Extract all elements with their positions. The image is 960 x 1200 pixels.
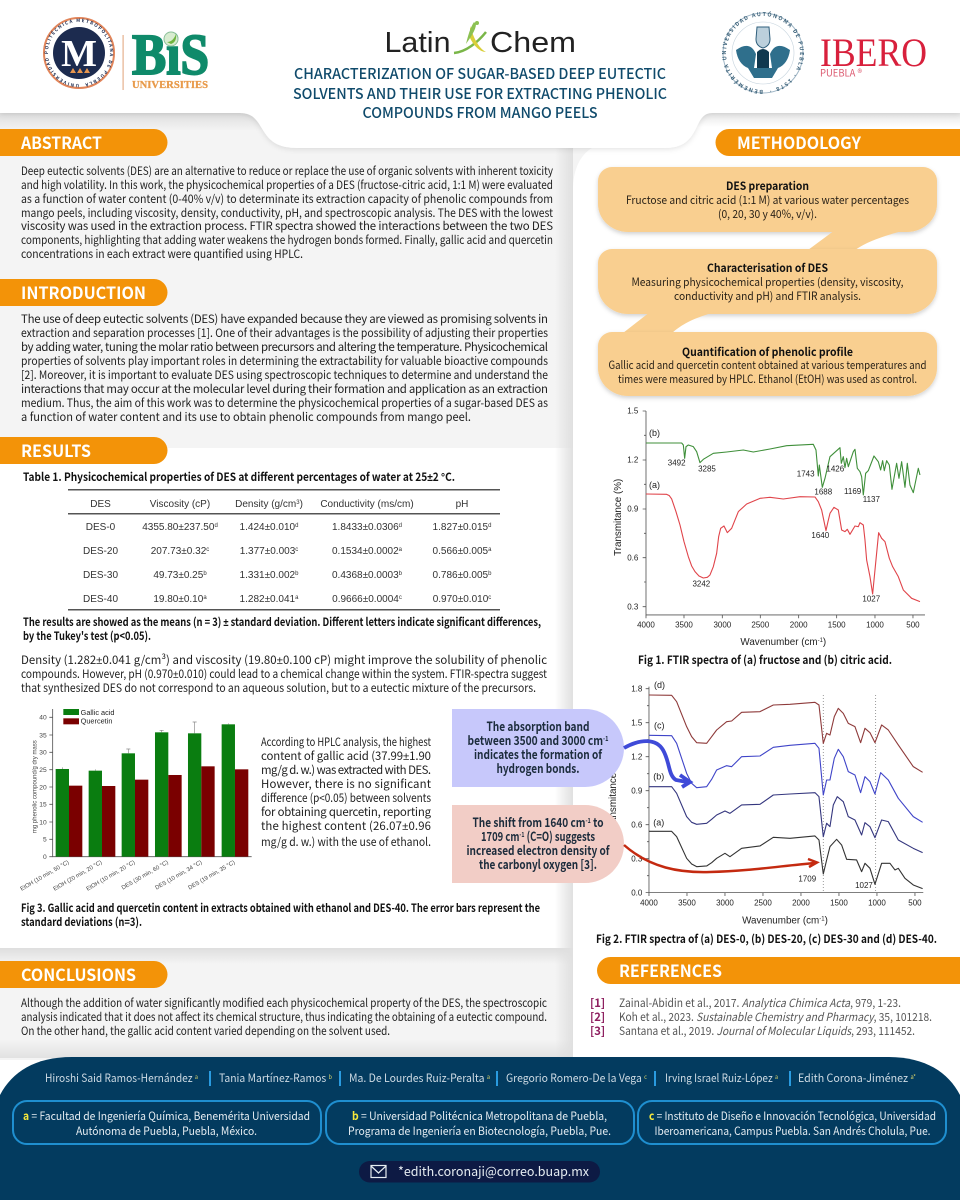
chart: FTIR spectra of DES-0 to DES-40: (d): [654, 680, 665, 690]
table 1: physicochemical properties: Table 1. Physicochemical properties of DES at different percentages of water at 25±2 °C.: [23, 469, 455, 485]
step: DES preparation: Fructose and citric acid (1:1 M) at various water percentages: [626, 192, 909, 208]
table 1: physicochemical properties: 3: [296, 500, 300, 506]
text: density and viscosity discussion: that synthesized DES do not correspond to an aqueous solution, but to a eutectic mixture of the precursors.: [21, 680, 536, 696]
table 1: physicochemical properties: 0.786±0.005: [433, 570, 488, 581]
step: quantification of phenolic profile: Quantification of phenolic profile: [682, 344, 853, 360]
table 1: physicochemical properties: 0.9666±0.0004: [332, 594, 399, 605]
authors: a: [195, 1072, 198, 1081]
text: introduction: by adding water, tuning the molar ratio between precursors and altering the temperature. Physicochemical: [21, 339, 548, 355]
callout: carbonyl shift: -1: [519, 830, 524, 840]
text: introduction: [2]. Moreover, it is important to evaluate DES using spectroscopic techniques to determine and understand the: [21, 367, 548, 383]
authors: Edith Corona-Jiménez: [798, 1070, 914, 1086]
callout: carbonyl shift: [452, 805, 624, 883]
heading: references: REFERENCES: [619, 958, 722, 982]
step: quantification of phenolic profile: times were measured by HPLC. Ethanol (EtOH) was used as control.: [618, 371, 917, 387]
chart: FTIR spectra of DES-0 to DES-40: 500: [908, 898, 922, 907]
table 1: physicochemical properties: Conductivity (ms/cm): [320, 499, 414, 510]
chart: FTIR spectra of DES-0 to DES-40: [608, 680, 923, 926]
table 1: physicochemical properties: Density (g/cm: [235, 499, 296, 510]
callout: carbonyl shift: (C=O) suggests: [524, 826, 595, 845]
arrow: blue to band: [624, 741, 690, 787]
authors: Hiroshi Said Ramos-Hernández: [45, 1070, 207, 1086]
callout: carbonyl shift: to: [591, 812, 604, 831]
table 1: physicochemical properties: 207.73±0.32: [151, 546, 206, 557]
text: abstract: viscosity was used in the extraction process. FTIR spectra showed the interactions between the two DES: [21, 218, 553, 234]
table 1: physicochemical properties: 0.1534±0.0002: [332, 546, 399, 557]
text: abstract: concentrations in each extract were quantified using HPLC.: [21, 246, 303, 262]
logo: Universidad Politecnica Metropolitana and BIS: UNIVERSIDAD POLITÉCNICA METROPOLITANA DE PUEBLA: [44, 18, 114, 88]
heading: introduction: INTRODUCTION: [21, 280, 146, 304]
text: conclusions: [21, 995, 547, 1039]
heading: references: [597, 957, 960, 984]
chart: FTIR spectra of fructose and citric acid: 0.3: [627, 602, 639, 611]
connector: step 2 to step 3: [623, 312, 715, 333]
table 1: physicochemical properties: ): [300, 499, 303, 510]
affiliation b: b = Universidad Politécnica Metropolitana de Puebla,: [352, 1108, 607, 1124]
table 1: physicochemical properties: d: [488, 523, 491, 529]
chart: FTIR spectra of fructose and citric acid: 1137: [863, 495, 880, 504]
callout: carbonyl shift: The shift from 1640 cm: [472, 812, 614, 831]
step: characterisation of DES: [598, 249, 937, 314]
chart: FTIR spectra of DES-0 to DES-40: 0.0: [631, 888, 643, 897]
chart: FTIR spectra of DES-0 to DES-40: 1.5: [631, 718, 643, 727]
text: HPLC analysis: According to HPLC analysis, the highest: [261, 734, 432, 750]
table 1: physicochemical properties: a: [295, 595, 299, 601]
text: density and viscosity discussion: [21, 652, 548, 696]
chart: FTIR spectra of fructose and citric acid: 4000: [637, 621, 655, 630]
chart: gallic acid and quercetin bar chart: EtOH (10 min, 20 °C): [86, 860, 136, 893]
chart: FTIR spectra of DES-0 to DES-40: (c): [654, 721, 664, 731]
table 1: physicochemical properties: 19.80±0.10: [153, 594, 203, 605]
text: abstract: mango peels, including viscosity, density, conductivity, pH, and spectroscopic analysis. The DES with the lowest: [21, 205, 554, 221]
chart: FTIR spectra of DES-0 to DES-40: Wavenumber (cm: [742, 915, 819, 926]
chart: FTIR spectra of fructose and citric acid: 1169: [844, 487, 862, 496]
table 1: physicochemical properties: d: [399, 523, 402, 529]
text: introduction: The use of deep eutectic solvents (DES) have expanded because they are viewed as promising solvents in: [21, 311, 548, 327]
logo: BUAP seal and IBERO Puebla: PUEBLA ®: [820, 64, 862, 80]
chart: FTIR spectra of DES-0 to DES-40: 1000: [868, 898, 886, 907]
caption: figure 3: [21, 900, 540, 930]
list: references: Zainal-Abidin et al., 2017. Analytica Chimica Acta, 979, 1-23.: [619, 995, 901, 1011]
step: characterisation of DES: Characterisation of DES: [707, 260, 828, 276]
text: conclusions: Although the addition of water significantly modified each physicochemical property of the DES, the spectroscopic: [21, 995, 547, 1011]
table 1: physicochemical properties: The results are showed as the means (n = 3) ± standard deviation. Different letters indicate significant differences,: [23, 614, 541, 630]
callout: hydrogen bonds: between 3500 and 3000 cm: [468, 730, 635, 749]
authors: Tania Martínez-Ramos: [219, 1070, 335, 1086]
chart: FTIR spectra of fructose and citric acid: 500: [906, 621, 920, 630]
chart: FTIR spectra of DES-0 to DES-40: 2500: [754, 898, 772, 907]
connector: step 1 to step 2: [808, 230, 905, 250]
list: references: [1]: [590, 995, 605, 1011]
chart: FTIR spectra of fructose and citric acid: 1426: [826, 465, 845, 474]
table 1: physicochemical properties: 0.4368±0.0003: [332, 570, 399, 581]
chart: gallic acid and quercetin bar chart: 5: [43, 837, 47, 844]
step: DES preparation: DES preparation: [726, 178, 809, 194]
chart: FTIR spectra of DES-0 to DES-40: 0.9: [631, 786, 643, 795]
chart: gallic acid and quercetin bar chart: 40: [39, 715, 47, 722]
text: introduction: interactions that may occur at the molecular level during their formation and application as an extraction: [21, 381, 548, 397]
chart: FTIR spectra of fructose and citric acid: 2500: [751, 621, 770, 630]
chart: FTIR spectra of DES-0 to DES-40: 1500: [830, 898, 848, 907]
text: HPLC analysis: the highest content (26.07±0.96: [261, 818, 431, 834]
chart: FTIR spectra of fructose and citric acid: 3000: [713, 621, 732, 630]
text: abstract: components, highlighting that adding water weakens the hydrogen bonds formed. Finally, gallic acid and quercetin: [21, 232, 553, 248]
chart: FTIR spectra of DES-0 to DES-40: 3500: [678, 898, 696, 907]
text: introduction: [21, 311, 548, 425]
text: introduction: a function of water content and its use to obtain phenolic compounds from mango peel.: [21, 409, 471, 425]
table 1: physicochemical properties: b: [203, 571, 207, 577]
table 1: physicochemical properties: d: [295, 523, 298, 529]
chart: FTIR spectra of DES-0 to DES-40: 3000: [716, 898, 734, 907]
table 1: physicochemical properties: pH: [456, 499, 468, 510]
chart: FTIR spectra of DES-0 to DES-40: 4000: [640, 898, 658, 907]
arrow: red to carbonyl peak: [624, 845, 817, 872]
chart: gallic acid and quercetin bar chart: DES (30 min, 60 °C): [121, 860, 170, 891]
affiliation a: [13, 1101, 321, 1144]
chart: FTIR spectra of fructose and citric acid: (a): [649, 480, 660, 490]
list: references: [3]: [590, 1023, 605, 1039]
heading: methodology: METHODOLOGY: [737, 130, 861, 154]
table 1: physicochemical properties: b: [488, 571, 492, 577]
heading: conclusions: [0, 961, 168, 988]
panel: footer: [0, 1057, 960, 1200]
text: HPLC analysis: mg/g d. w.) with the use of ethanol.: [261, 834, 431, 850]
logo: Universidad Politecnica Metropolitana and BIS: M: [61, 33, 97, 75]
table 1: physicochemical properties: Viscosity (cP): [150, 499, 210, 510]
callout: hydrogen bonds: hydrogen bonds.: [496, 758, 580, 777]
table 1: physicochemical properties: by the Tukey's test (p<0.05).: [23, 628, 151, 644]
callout: carbonyl shift: 1709 cm: [481, 826, 532, 845]
step: characterisation of DES: Measuring physicochemical properties (density, viscosity,: [632, 274, 904, 290]
chart: FTIR spectra of fructose and citric acid: 2000: [790, 621, 808, 630]
chart: FTIR spectra of DES-0 to DES-40: 0.3: [631, 854, 643, 863]
step: characterisation of DES: conductivity and pH) and FTIR analysis.: [674, 288, 861, 304]
table 1: physicochemical properties: 49.73±0.25: [153, 570, 203, 581]
text: abstract: as a function of water content (0-40% v/v) to determinate its extraction capacity of phenolic compounds from: [21, 191, 553, 207]
list: references: [590, 995, 932, 1039]
text: introduction: extraction and separation processes [1]. One of their advantages is the possibility of adjusting their properties: [21, 325, 548, 341]
table 1: physicochemical properties: 1.8433±0.0306: [332, 522, 399, 533]
chart: FTIR spectra of fructose and citric acid: 1640: [811, 531, 830, 540]
table 1: physicochemical properties: 1.282±0.041: [240, 594, 295, 605]
title: COMPOUNDS FROM MANGO PEELS: [362, 102, 598, 123]
chart: gallic acid and quercetin bar chart: Quercetin: [81, 717, 112, 726]
list: references: Koh et al., 2023. Sustainable Chemistry and Pharmacy, 35, 101218.: [619, 1009, 932, 1025]
authors: a*: [910, 1072, 916, 1081]
table 1: physicochemical properties: 1.331±0.002: [240, 570, 295, 581]
table 1: physicochemical properties: 0.970±0.010: [433, 594, 488, 605]
chart: FTIR spectra of DES-0 to DES-40: 1.2: [631, 752, 643, 761]
logo: Universidad Politecnica Metropolitana and BIS: [43, 17, 209, 91]
chart: FTIR spectra of DES-0 to DES-40: 0.6: [631, 820, 643, 829]
table 1: physicochemical properties: b: [295, 571, 299, 577]
chart: FTIR spectra of DES-0 to DES-40: 1709: [798, 875, 817, 884]
chart: FTIR spectra of fructose and citric acid: 3492: [668, 458, 686, 467]
table 1: physicochemical properties: 1.827±0.015: [433, 522, 488, 533]
table 1: physicochemical properties: c: [295, 547, 298, 553]
heading: introduction: [0, 279, 168, 306]
title: CHARACTERIZATION OF SUGAR-BASED DEEP EUTECTIC: [294, 63, 666, 84]
text: density and viscosity discussion: Density (1.282±0.041 g/cm³) and viscosity (19.80±0.100 cP) might improve the solubility of phenolic: [21, 652, 547, 668]
chart: gallic acid and quercetin bar chart: mg phenolic compound/g dry mass: [33, 740, 39, 833]
title: SOLVENTS AND THEIR USE FOR EXTRACTING PHENOLIC: [293, 83, 667, 104]
chart: FTIR spectra of fructose and citric acid: [613, 407, 925, 648]
authors: c: [644, 1072, 647, 1081]
affiliation c: [638, 1101, 946, 1144]
chart: FTIR spectra of fructose and citric acid: (b): [649, 428, 660, 438]
text: HPLC analysis: [261, 734, 432, 850]
callout: hydrogen bonds: [452, 709, 624, 787]
chart: FTIR spectra of fructose and citric acid: 1743: [797, 470, 815, 479]
affiliation a: Autónoma de Puebla, Puebla, México.: [76, 1123, 257, 1139]
chart: gallic acid and quercetin bar chart: 35: [39, 732, 47, 739]
table 1: physicochemical properties: DES-30: [83, 570, 118, 581]
heading: abstract: [0, 129, 168, 156]
caption: figure 3: standard deviations (n=3).: [21, 914, 142, 930]
list: references: Santana et al., 2019. Journal of Molecular Liquids, 293, 111452.: [619, 1023, 915, 1039]
chart: FTIR spectra of fructose and citric acid: 1027: [862, 594, 881, 603]
heading: methodology: [716, 129, 960, 156]
chart: FTIR spectra of DES-0 to DES-40: 1027: [855, 881, 873, 890]
chart: FTIR spectra of DES-0 to DES-40: Transmitance (%): [608, 755, 619, 832]
chart: gallic acid and quercetin bar chart: 0: [43, 854, 47, 861]
text: introduction: properties of solvents play important roles in determining the extractability for valuable bioactive compounds: [21, 353, 548, 369]
chart: FTIR spectra of fructose and citric acid: 1000: [866, 621, 884, 630]
chart: FTIR spectra of DES-0 to DES-40: 1.8: [631, 684, 643, 693]
table 1: physicochemical properties: 4355.80±237.50: [142, 522, 214, 533]
step: quantification of phenolic profile: [598, 332, 937, 396]
affiliation b: [326, 1101, 634, 1144]
text: HPLC analysis: However, there is no significant: [261, 776, 432, 792]
text: abstract: [21, 163, 554, 262]
authors: Gregorio Romero-De la Vega: [506, 1070, 652, 1086]
logo: Universidad Politecnica Metropolitana and BIS: BiS: [132, 22, 209, 87]
chart: FTIR spectra of fructose and citric acid: Transmitance (%): [613, 479, 624, 556]
chart: gallic acid and quercetin bar chart: 30: [39, 750, 47, 757]
table 1: physicochemical properties: a: [203, 595, 207, 601]
chart: FTIR spectra of fructose and citric acid: 1.2: [627, 456, 639, 465]
chart: gallic acid and quercetin bar chart: DES (10 min, 34 °C): [155, 860, 203, 891]
chart: FTIR spectra of fructose and citric acid: 0.6: [627, 553, 639, 562]
logo: LatinChem: [384, 21, 576, 59]
callout: carbonyl shift: -1: [585, 816, 591, 826]
chart: FTIR spectra of fructose and citric acid: 3285: [698, 464, 716, 473]
table 1: physicochemical properties: 1.377±0.003: [240, 546, 295, 557]
chart: FTIR spectra of fructose and citric acid: 3242: [692, 580, 711, 589]
text: HPLC analysis: content of gallic acid (37.99±1.90: [261, 748, 431, 764]
chart: FTIR spectra of fructose and citric acid: 1500: [828, 621, 846, 630]
chart: gallic acid and quercetin bar chart: Gallic acid: [81, 708, 114, 717]
email pill: *edith.coronaji@correo.buap.mx: [398, 1161, 590, 1180]
chart: FTIR spectra of fructose and citric acid: ): [823, 637, 826, 648]
callout: carbonyl shift: increased electron density of: [466, 840, 611, 859]
authors: Ma. De Lourdes Ruiz-Peralta: [349, 1070, 494, 1086]
table 1: physicochemical properties: DES: [90, 499, 111, 510]
text: HPLC analysis: for obtaining quercetin, reporting: [261, 804, 432, 820]
table 1: physicochemical properties: c: [206, 547, 209, 553]
chart: gallic acid and quercetin bar chart: [20, 708, 252, 893]
text: conclusions: analysis indicated that it does not affect its chemical structure, thus indicating the obtaining of a eutectic compound.: [21, 1009, 547, 1025]
heading: results: [0, 437, 168, 464]
callout: hydrogen bonds: -1: [603, 734, 608, 744]
table 1: physicochemical properties: a: [488, 547, 492, 553]
chart: FTIR spectra of fructose and citric acid: 1688: [814, 487, 833, 496]
chart: FTIR spectra of DES-0 to DES-40: ): [825, 915, 828, 926]
chart: FTIR spectra of DES-0 to DES-40: (a): [653, 818, 664, 828]
table 1: physicochemical properties: 0.566±0.005: [433, 546, 488, 557]
chart: gallic acid and quercetin bar chart: 15: [39, 802, 47, 809]
table 1: physicochemical properties: a: [399, 547, 403, 553]
authors: [45, 1070, 916, 1086]
callout: hydrogen bonds: The absorption band: [486, 716, 590, 735]
logo: Universidad Politecnica Metropolitana and BIS: UNIVERSITIES: [132, 80, 208, 91]
chart: FTIR spectra of DES-0 to DES-40: 2000: [792, 898, 810, 907]
authors: a: [487, 1072, 490, 1081]
logo: BUAP seal and IBERO Puebla: [722, 11, 927, 94]
panel: methodology flow: [598, 167, 937, 396]
chart: gallic acid and quercetin bar chart: DES (19 min, 35 °C): [188, 860, 236, 891]
table 1: physicochemical properties: c: [399, 595, 402, 601]
chart: FTIR spectra of DES-0 to DES-40: (b): [653, 771, 664, 781]
text: introduction: medium. Thus, the aim of this work was to determine the physicochemical properties of a sugar-based DES as: [21, 395, 548, 411]
text: conclusions: On the other hand, the gallic acid content varied depending on the solvent used.: [21, 1023, 390, 1039]
heading: results: RESULTS: [21, 438, 91, 462]
chart: FTIR spectra of fructose and citric acid: 3500: [675, 621, 693, 630]
authors: Irving Israel Ruiz-López: [665, 1070, 785, 1086]
callout: carbonyl shift: the carbonyl oxygen [3].: [479, 854, 597, 873]
heading: conclusions: CONCLUSIONS: [21, 962, 136, 986]
text: HPLC analysis: difference (p<0.05) between solvents: [261, 790, 431, 806]
table 1: physicochemical properties: DES-40: [83, 594, 118, 605]
text: abstract: Deep eutectic solvents (DES) are an alternative to reduce or replace the use of organic solvents with inherent toxicity: [21, 163, 553, 179]
affiliation a: a = Facultad de Ingeniería Química, Benemérita Universidad: [23, 1108, 310, 1124]
chart: FTIR spectra of fructose and citric acid: 1.5: [627, 407, 639, 416]
title: [293, 63, 667, 123]
affiliation c: Iberoamericana, Campus Puebla. San Andrés Cholula, Pue.: [654, 1123, 930, 1139]
step: DES preparation: (0, 20, 30 y 40%, v/v).: [718, 206, 817, 222]
chart: gallic acid and quercetin bar chart: 10: [39, 819, 47, 826]
table 1: physicochemical properties: 1.424±0.010: [240, 522, 295, 533]
affiliation b: Programa de Ingeniería en Biotecnología, Puebla, Pue.: [348, 1123, 611, 1139]
text: density and viscosity discussion: compounds. However, pH (0.970±0.010) could lead to a chemical change within the system. FTIR-spectra suggest: [21, 666, 548, 682]
chart: FTIR spectra of DES-0 to DES-40: -1: [819, 916, 825, 922]
table 1: physicochemical properties: [23, 469, 541, 644]
text: HPLC analysis: mg/g d. w.) was extracted with DES.: [261, 762, 431, 778]
chart: FTIR spectra of fructose and citric acid: 0.9: [627, 505, 639, 514]
caption: figure 1: Fig 1. FTIR spectra of (a) fructose and (b) citric acid.: [638, 652, 892, 668]
authors: a: [775, 1072, 778, 1081]
heading: abstract: ABSTRACT: [20, 130, 102, 154]
logo: LatinChem: Latin: [384, 27, 450, 59]
chart: gallic acid and quercetin bar chart: 25: [39, 767, 47, 774]
text: abstract: and high volatility. In this work, the physicochemical properties of a DES (fructose-citric acid, 1:1 M) were evaluated: [21, 177, 553, 193]
chart: gallic acid and quercetin bar chart: EtOH (20 min, 20 °C): [53, 860, 103, 893]
chart: FTIR spectra of fructose and citric acid: -1: [818, 638, 824, 644]
table 1: physicochemical properties: c: [488, 595, 491, 601]
authors: b: [329, 1072, 332, 1081]
logo: LatinChem: Chem: [490, 27, 576, 59]
logo: BUAP seal and IBERO Puebla: IBERO: [820, 30, 927, 75]
chart: gallic acid and quercetin bar chart: 20: [39, 784, 47, 791]
table 1: physicochemical properties: d: [214, 523, 218, 529]
chart: FTIR spectra of fructose and citric acid: Wavenumber (cm: [740, 637, 818, 648]
logo: BUAP seal and IBERO Puebla: BENEMÉRITA UNIVERSIDAD AUTÓNOMA DE PUEBLA · 1578 ·: [722, 11, 804, 94]
chart: gallic acid and quercetin bar chart: EtOH (10 min, 50 °C): [20, 860, 70, 893]
table 1: physicochemical properties: DES-20: [83, 546, 118, 557]
affiliation c: c = Instituto de Diseño e Innovación Tecnológica, Universidad: [649, 1108, 936, 1124]
table 1: physicochemical properties: b: [399, 571, 403, 577]
table 1: physicochemical properties: DES-0: [86, 522, 116, 533]
caption: figure 3: Fig 3. Gallic acid and quercetin content in extracts obtained with ethanol and DES-40. The error bars represent the: [21, 900, 540, 916]
list: references: [2]: [590, 1009, 605, 1025]
callout: hydrogen bonds: indicates the formation of: [474, 744, 603, 763]
step: DES preparation: [598, 167, 937, 232]
